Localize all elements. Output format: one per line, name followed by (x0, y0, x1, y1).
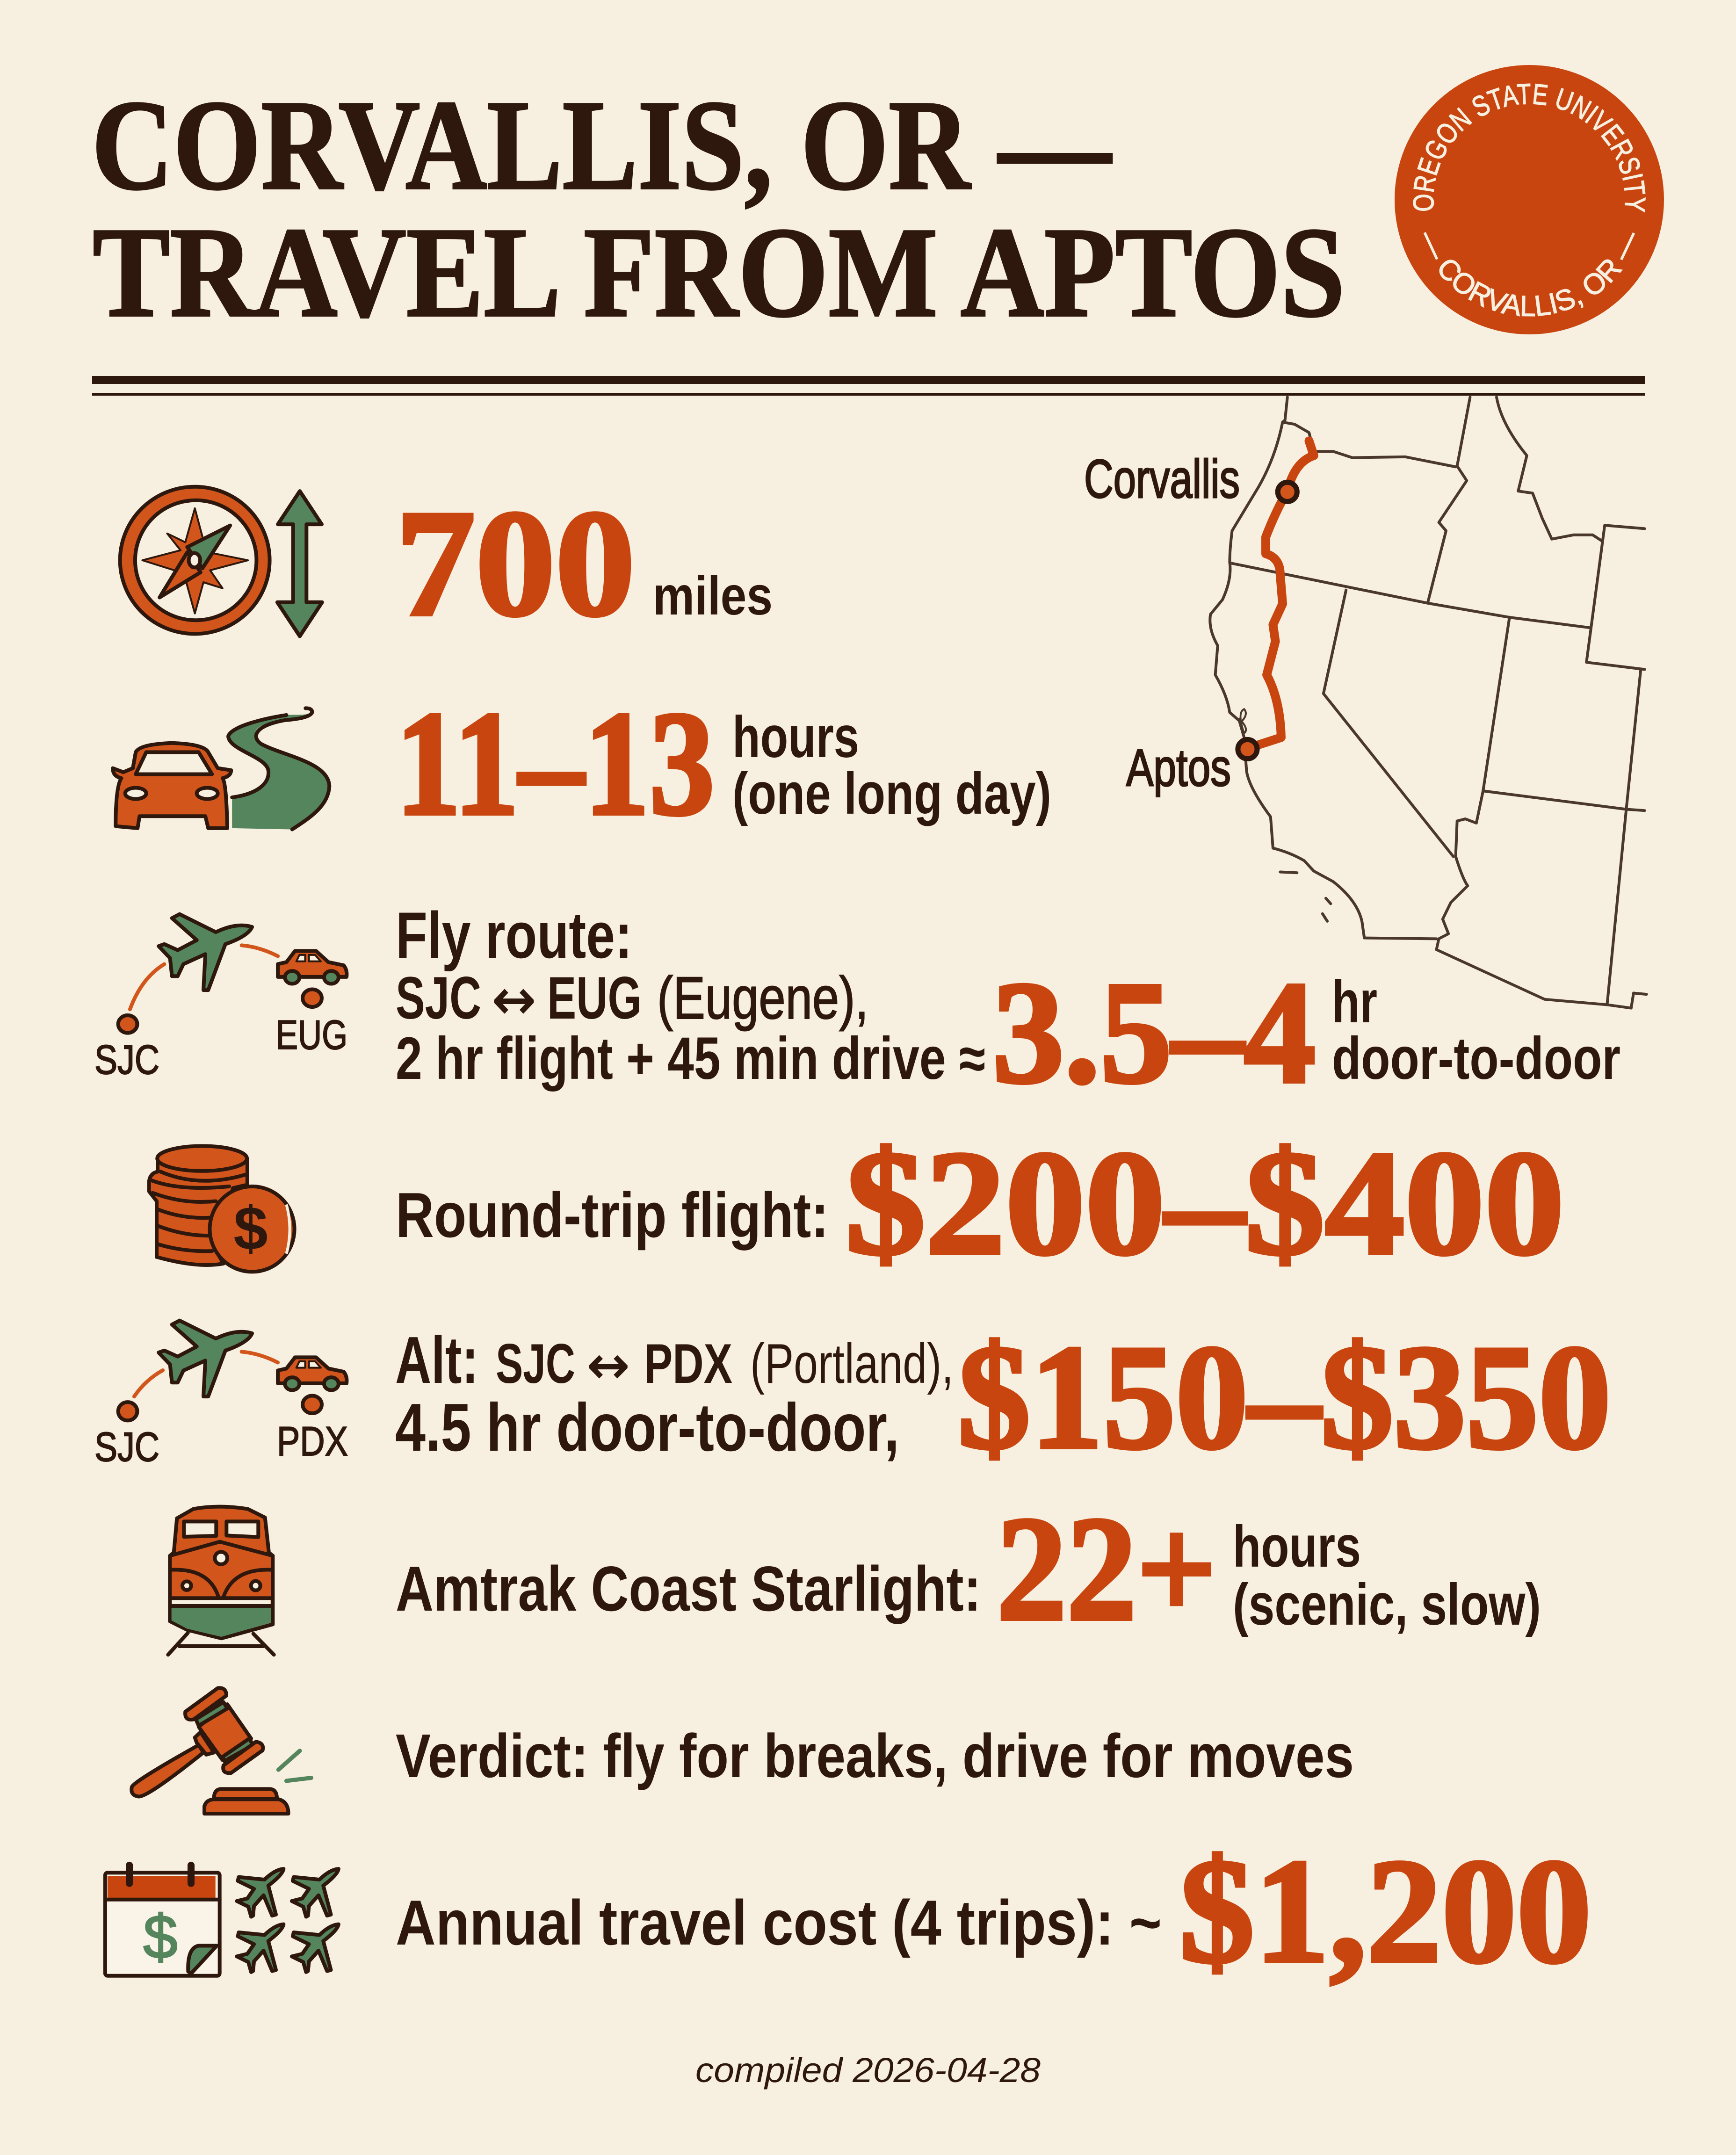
row 2: drive time: hours (732, 705, 859, 770)
row 8: annual cost: Annual travel cost (4 trips): ~ (396, 1887, 1162, 1958)
badge: Oregon State University seal: OREGON STATE UNIVERSITY (1408, 78, 1651, 213)
row 3: fly route SJC to EUG: ↔ (492, 967, 536, 1032)
icon: coin stack (149, 1146, 295, 1272)
row 2: drive time (113, 681, 1051, 846)
title: CORVALLIS, OR — (92, 73, 1113, 217)
row 2: drive time: 11–13 (396, 681, 715, 846)
row 7: verdict: Verdict: fly for breaks, drive for moves (396, 1721, 1354, 1790)
row 8: annual cost: $1,200 (1179, 1829, 1591, 1994)
row 7: verdict (131, 1688, 1354, 1814)
row 4: round-trip flight price (149, 1121, 1564, 1286)
icon: plane route SJC to PDX: SJC (94, 1424, 159, 1470)
row 6: Amtrak Coast Starlight: 22+ (997, 1486, 1216, 1652)
row 3: fly route SJC to EUG: door-to-door (1332, 1025, 1620, 1092)
icon: car and winding road (113, 708, 329, 829)
row 3: fly route SJC to EUG: 2 hr flight + 45 min drive ≈ (396, 1025, 985, 1092)
icon: coin stack: $ (233, 1194, 268, 1263)
row 5: alternate route via PDX: SJC (496, 1332, 575, 1395)
row 3: fly route SJC to EUG: EUG (547, 965, 642, 1032)
icon: calendar with dollar and four planes (105, 1865, 339, 1976)
row 2: drive time: (one long day) (732, 761, 1051, 826)
icon: plane route SJC to PDX (94, 1321, 348, 1470)
badge: Oregon State University seal: — CORVALLIS, OR — (1412, 225, 1646, 323)
row 6: Amtrak Coast Starlight: (scenic, slow) (1233, 1572, 1541, 1637)
row 5: alternate route via PDX: PDX (644, 1332, 732, 1395)
row 6: Amtrak Coast Starlight: hours (1233, 1514, 1361, 1579)
map: US West with route from Aptos to Corvallis: Aptos (1126, 738, 1231, 797)
row 8: annual cost (105, 1829, 1591, 1994)
icon: plane route SJC to EUG: EUG (276, 1012, 347, 1058)
icon: plane route SJC to PDX: PDX (277, 1418, 348, 1464)
row 6: Amtrak Coast Starlight: Amtrak Coast Starlight: (396, 1553, 981, 1624)
row 3: fly route SJC to EUG: hr (1332, 969, 1377, 1035)
row 5: alternate route via PDX (94, 1315, 1611, 1480)
title (92, 73, 1345, 344)
row 3: fly route SJC to EUG: (Eugene), (657, 965, 868, 1032)
title: TRAVEL FROM APTOS (93, 201, 1345, 344)
row 5: alternate route via PDX: 4.5 hr door-to-door, (395, 1389, 899, 1465)
row 3: fly route SJC to EUG: 3.5–4 (992, 951, 1316, 1114)
badge: Oregon State University seal (1395, 65, 1664, 334)
map: US West with route from Aptos to Corvallis (1084, 397, 1647, 1008)
row 4: round-trip flight price: $200–$400 (846, 1121, 1564, 1286)
row 5: alternate route via PDX: (Portland), (750, 1332, 954, 1395)
row 6: Amtrak Coast Starlight (168, 1486, 1541, 1655)
row 5: alternate route via PDX: Alt: (395, 1323, 478, 1397)
map: US West with route from Aptos to Corvallis: Corvallis (1084, 448, 1240, 509)
header double rule (92, 376, 1645, 396)
icon: gavel (131, 1688, 311, 1814)
row 3: fly route SJC to EUG: Fly route: (396, 898, 632, 972)
row 5: alternate route via PDX: ↔ (587, 1335, 629, 1395)
icon: locomotive (168, 1507, 274, 1655)
footer: compiled date: compiled 2026-04-28 (695, 2051, 1041, 2090)
row 1: distance (120, 478, 773, 648)
row 3: fly route SJC to EUG: SJC (396, 965, 481, 1032)
icon: compass and vertical arrow (120, 487, 322, 636)
icon: plane route SJC to EUG: SJC (94, 1036, 159, 1083)
row 4: round-trip flight price: Round-trip flight: (396, 1179, 829, 1251)
row 5: alternate route via PDX: $150–$350 (958, 1315, 1611, 1480)
row 1: distance: 700 (396, 478, 635, 648)
row 1: distance: miles (653, 565, 773, 626)
icon: plane route SJC to EUG (94, 914, 347, 1083)
icon: calendar with dollar and four planes: $ (143, 1902, 178, 1971)
row 3: fly route SJC to EUG (94, 898, 1620, 1114)
